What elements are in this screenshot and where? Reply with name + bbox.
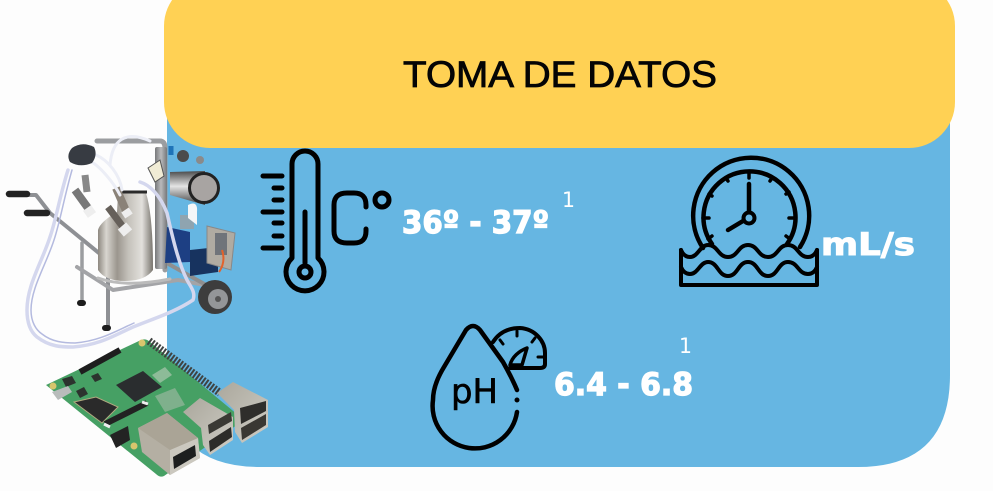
HDMI port	[74, 397, 118, 423]
flow unit: mL/s	[821, 227, 915, 263]
title: TOMA DE DATOS	[403, 54, 717, 95]
ethernet port	[138, 413, 200, 475]
camera connector	[105, 403, 147, 424]
temperature reference: 1	[562, 188, 575, 212]
GPIO pins	[149, 341, 220, 393]
milk can	[98, 191, 153, 281]
icon: pH drop with gauge	[433, 326, 545, 448]
wheel	[198, 280, 232, 314]
micro usb port	[52, 386, 72, 400]
icon: celsius symbol	[334, 193, 389, 243]
small components	[62, 373, 102, 398]
teat cups	[75, 190, 88, 208]
display connector	[80, 350, 120, 372]
processor chip	[116, 371, 162, 402]
circuit board	[46, 339, 244, 477]
machine frame and legs	[28, 141, 215, 327]
image: raspberry pi board	[46, 339, 268, 477]
central pole	[155, 147, 167, 269]
milk tubes	[27, 137, 194, 347]
audio jack	[110, 426, 130, 448]
icon: pH drop with gauge: pH	[451, 372, 498, 412]
panel: yellow header	[164, 0, 955, 148]
handle grips	[9, 194, 47, 213]
claw	[68, 144, 96, 165]
leg feet	[80, 303, 108, 328]
mounting holes	[138, 340, 146, 346]
pH reference: 1	[679, 334, 692, 358]
pump and motor	[165, 227, 190, 263]
vacuum cylinder	[170, 171, 205, 205]
panel: blue background	[167, 100, 950, 467]
icon: thermometer	[263, 151, 324, 291]
image: milking machine	[9, 137, 235, 347]
temperature value: 36º - 37º	[402, 205, 549, 241]
pH value: 6.4 - 6.8	[554, 367, 693, 403]
USB ports	[183, 398, 233, 455]
icon: flow gauge	[681, 158, 817, 285]
